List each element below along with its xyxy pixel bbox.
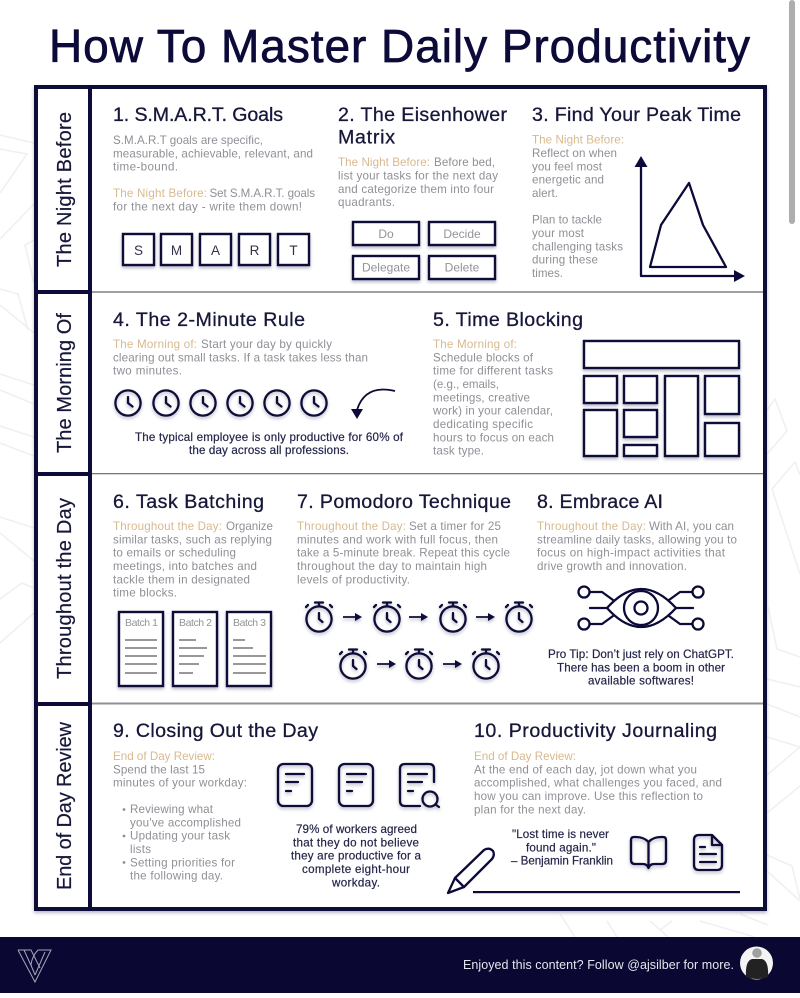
icon: SMART letter boxes (123, 234, 309, 265)
side label: The Night Before: The Night Before (54, 112, 76, 267)
chart: peak energy graph (634, 156, 745, 282)
panel: 6 task batching: meetings, into batches and (113, 560, 257, 573)
panel: 1 SMART goals: time-bound. (113, 161, 178, 174)
callout: Benjamin Franklin quote: found again." (526, 841, 596, 854)
panel: 3 peak time: The Night Before: (532, 134, 624, 146)
callout: productivity statistic: The typical employee is only productive for 60% of (135, 431, 404, 444)
panel: 8 embrace AI: 8. Embrace AI (537, 491, 663, 513)
panel: 1 SMART goals: 1. S.M.A.R.T. Goals (113, 104, 283, 126)
panel: 8 embrace AI: With AI, you can (649, 520, 734, 533)
callout: 79 percent statistic: 79% of workers agreed (296, 823, 417, 836)
footer follow text: Enjoyed this content? Follow @ajsilber for more. (463, 958, 734, 972)
panel: 2 Eisenhower matrix: Matrix (338, 126, 395, 148)
panel: 2 Eisenhower matrix: quadrants. (338, 196, 395, 209)
panel: 4 two minute rule: The Morning of: (113, 338, 197, 351)
bullet list: you've accomplished (130, 816, 241, 829)
panel: 1 SMART goals (113, 104, 315, 265)
panel: 9 closing out the day: End of Day Review: (113, 750, 215, 763)
callout: 79 percent statistic: they are productive for a (291, 850, 422, 863)
panel: 6 task batching: tackle them in designated (113, 573, 250, 586)
icon: SMART letter boxes: S (134, 243, 143, 258)
panel: 3 peak time: energetic and (532, 174, 604, 187)
panel: 7 pomodoro: Throughout the Day: (297, 520, 406, 533)
panel: 10 productivity journaling: At the end of each day, jot down what you (474, 763, 697, 776)
panel: 3 peak time (532, 104, 745, 282)
callout: 79 percent statistic: complete eight-hour (302, 863, 410, 876)
panel: 7 pomodoro: minutes and work with full focus, then (297, 533, 498, 546)
icon: SMART letter boxes: A (211, 243, 220, 258)
panel: 3 peak time: during these (532, 254, 598, 267)
panel: 6 task batching: similar tasks, such as replying (113, 533, 272, 546)
panel: 5 time blocking: Schedule blocks of (433, 351, 534, 364)
panel: 3 peak time: 3. Find Your Peak Time (532, 104, 741, 126)
callout: 79 percent statistic: workday. (331, 876, 380, 889)
panel: 1 SMART goals: S.M.A.R.T goals are specific, (113, 134, 263, 147)
panel: 9 closing out the day: Spend the last 15 (113, 763, 205, 776)
panel: 4 two minute rule (113, 309, 404, 457)
panel: 8 embrace AI: Throughout the Day: (537, 520, 646, 533)
icon: batch documents: Batch 1 (125, 617, 158, 629)
icon: logo (18, 950, 51, 982)
panel: 5 time blocking: meetings, creative (433, 391, 530, 404)
panel: 2 Eisenhower matrix (338, 104, 507, 279)
bullet list: Reviewing what (130, 803, 214, 816)
callout: pro tip: There has been a boom in other (557, 661, 725, 674)
icon: four quadrant boxes: Delete (445, 260, 480, 274)
title: How To Master Daily Productivity (49, 20, 750, 72)
panel: 3 peak time: Plan to tackle (532, 214, 602, 227)
bullet list (123, 803, 241, 883)
panel: 5 time blocking (432, 309, 739, 458)
callout: productivity statistic: the day across all professions. (189, 444, 349, 457)
callout: 79 percent statistic (291, 823, 422, 889)
bullet list: the following day. (130, 870, 223, 883)
icon: pencil (448, 849, 494, 893)
panel: 5 time blocking: The Morning of: (433, 338, 517, 351)
panel: 6 task batching: 6. Task Batching (113, 491, 264, 513)
panel: 5 time blocking: hours to focus on each (433, 431, 554, 444)
panel: 5 time blocking: dedicating specific (433, 418, 533, 431)
panel: 5 time blocking: work) in your calendar, (432, 405, 553, 418)
icon: four quadrant boxes: Delegate (362, 260, 410, 274)
panel: 2 Eisenhower matrix: list your tasks for the next day (338, 170, 498, 182)
arrow: curved pointing down (351, 390, 395, 419)
icon: four quadrant boxes: Decide (443, 227, 481, 241)
panel: 6 task batching: Throughout the Day: (113, 520, 222, 533)
panel: 3 peak time: your most (532, 227, 585, 240)
panel: 10 productivity journaling: End of Day Review: (474, 750, 576, 763)
panel: 1 SMART goals: measurable, achievable, relevant, and (113, 147, 313, 160)
icon: batch documents: Batch 2 (179, 617, 212, 629)
side label: Throughout the Day: Throughout the Day (54, 498, 76, 679)
icon: SMART letter boxes: T (289, 243, 298, 258)
scrollbar (789, 0, 795, 224)
icon: batch documents (119, 612, 271, 686)
icon: four quadrant boxes: Do (378, 227, 394, 241)
panel: 7 pomodoro: 7. Pomodoro Technique (297, 491, 511, 513)
panel: 7 pomodoro (297, 491, 532, 679)
panel: 4 two minute rule: two minutes. (113, 365, 182, 378)
panel: 10 productivity journaling: plan for the next day. (474, 803, 586, 816)
panel: 2 Eisenhower matrix: 2. The Eisenhower (338, 104, 507, 126)
panel: 8 embrace AI: streamline daily tasks, allowing you to (537, 533, 737, 546)
panel: 6 task batching: Organize (226, 520, 273, 533)
panel: 9 closing out the day: minutes of your workday: (113, 777, 247, 790)
panel: 9 closing out the day: 9. Closing Out the Day (113, 720, 318, 742)
panel: 7 pomodoro: Set a timer for 25 (409, 520, 501, 533)
panel: 1 SMART goals: for the next day - write them down! (113, 200, 302, 213)
panel: 10 productivity journaling: how you can improve. Use this reflection to (474, 790, 703, 803)
panel: 7 pomodoro: levels of productivity. (297, 573, 410, 586)
icon: SMART letter boxes: R (250, 243, 260, 258)
writing line (473, 891, 740, 893)
panel: 7 pomodoro: throughout the day to maintain high (297, 560, 487, 573)
callout: pro tip (548, 648, 734, 688)
bullet list: Updating your task (130, 830, 230, 843)
panel: 10 productivity journaling: accomplished, what challenges you faced, and (474, 777, 722, 790)
icon: document (694, 835, 722, 870)
side label: The Morning Of: The Morning Of (54, 313, 76, 453)
panel: 2 Eisenhower matrix: The Night Before: (338, 156, 430, 169)
panel: 3 peak time: challenging tasks (532, 240, 623, 253)
panel: 4 two minute rule: Start your day by quickly (201, 338, 332, 351)
icon: documents and search (278, 764, 439, 807)
callout: pro tip: available softwares! (588, 675, 694, 688)
panel: 5 time blocking: (e.g., emails, (433, 378, 499, 391)
panel: 3 peak time: times. (532, 267, 563, 280)
panel: 4 two minute rule: 4. The 2-Minute Rule (113, 309, 305, 331)
panel: 3 peak time: you feel most (532, 160, 603, 173)
callout: Benjamin Franklin quote: "Lost time is never (512, 828, 609, 841)
icon: open book (631, 837, 666, 868)
callout: pro tip: Pro Tip: Don’t just rely on ChatGPT. (548, 648, 734, 661)
panel: 6 task batching: to emails or scheduling (113, 547, 236, 560)
panel: 8 embrace AI: focus on high-impact activities that (537, 547, 726, 560)
avatar (740, 946, 773, 980)
panel: 5 time blocking: task type. (433, 445, 484, 458)
icon: six clocks (115, 390, 327, 416)
panel: 8 embrace AI: drive growth and innovation. (537, 560, 687, 573)
panel: 9 closing out the day (113, 720, 439, 889)
callout: Benjamin Franklin quote (511, 828, 613, 868)
panel: 3 peak time: alert. (532, 187, 558, 200)
footer bar (0, 937, 800, 993)
panel: 3 peak time: Reflect on when (532, 147, 617, 160)
panel: 10 productivity journaling: 10. Productivity Journaling (474, 720, 717, 742)
panel: 4 two minute rule: clearing out small tasks. If a task takes less than (113, 351, 368, 364)
panel: 6 task batching (113, 491, 273, 686)
icon: calendar blocks (584, 341, 739, 456)
panel: 6 task batching: time blocks. (113, 587, 177, 600)
side label: End of Day Review: End of Day Review (54, 721, 76, 890)
icon: four quadrant boxes (353, 222, 495, 279)
callout: productivity statistic (135, 431, 404, 457)
icon: AI eye circuit (578, 586, 704, 630)
callout: Benjamin Franklin quote: – Benjamin Franklin (511, 855, 613, 868)
icon: timer sequence (306, 602, 532, 679)
icon: batch documents: Batch 3 (233, 617, 266, 629)
panel: 2 Eisenhower matrix: and categorize them into four (338, 183, 494, 196)
bullet list: lists (130, 843, 151, 856)
main framed table (34, 85, 765, 911)
panel: 5 time blocking: 5. Time Blocking (433, 309, 583, 331)
bullet list: Setting priorities for (130, 856, 235, 869)
panel: 10 productivity journaling (448, 720, 740, 893)
panel: 5 time blocking: time for different tasks (433, 365, 553, 378)
icon: SMART letter boxes: M (171, 243, 182, 258)
panel: 1 SMART goals: The Night Before: (113, 187, 207, 200)
panel: 8 embrace AI (537, 491, 737, 688)
panel: 2 Eisenhower matrix: Before bed, (434, 156, 495, 169)
callout: 79 percent statistic: that they do not believe (293, 836, 419, 849)
panel: 1 SMART goals: Set S.M.A.R.T. goals (210, 187, 315, 200)
panel: 7 pomodoro: take a 5-minute break. Repeat this cycle (297, 547, 510, 560)
